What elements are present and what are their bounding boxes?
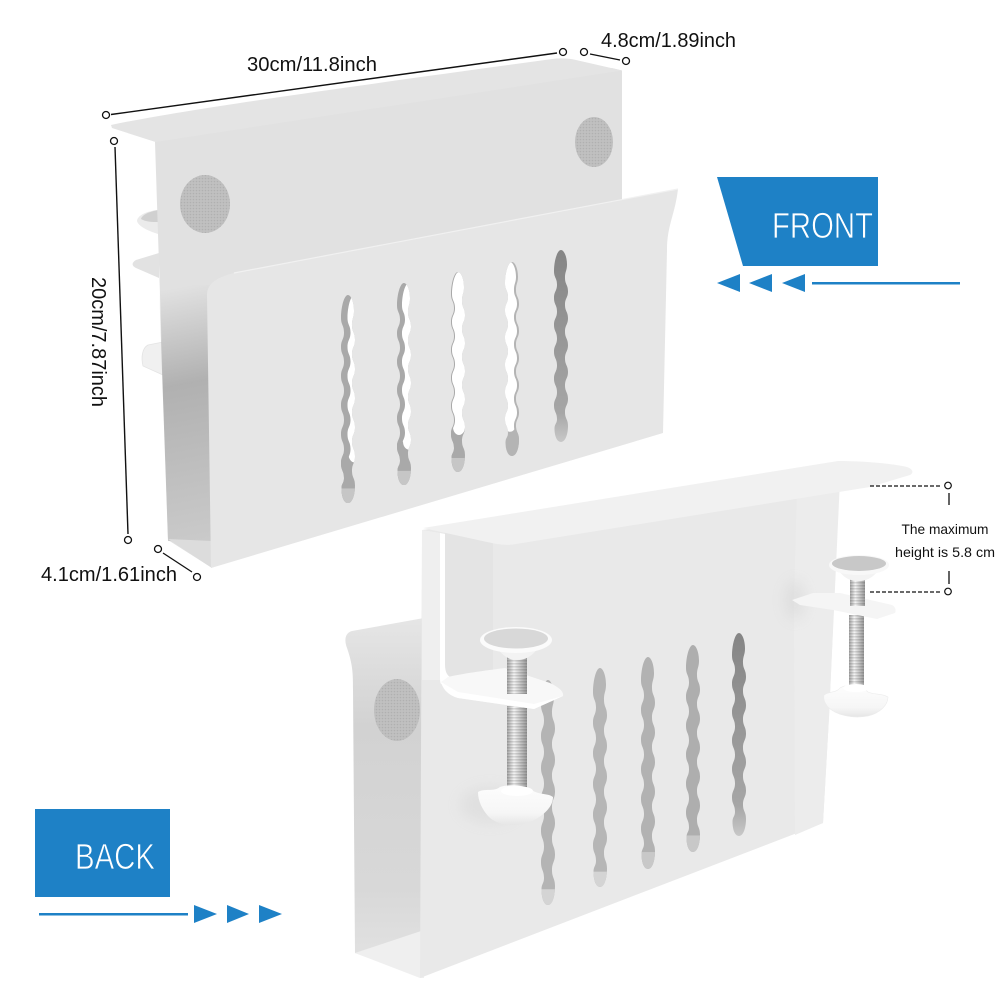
front panel top highlight bbox=[234, 189, 678, 273]
upper screw bbox=[507, 655, 527, 694]
front badge bbox=[717, 177, 878, 266]
callout: maximum clamp height: The maximum bbox=[902, 521, 988, 537]
slot a bbox=[541, 680, 555, 905]
slot 5 bbox=[554, 250, 568, 442]
inner recess bbox=[445, 530, 493, 682]
callout: maximum clamp height: height is 5.8 cm bbox=[895, 544, 995, 560]
front arrows bbox=[717, 274, 960, 292]
main panel bbox=[420, 470, 840, 978]
mesh pad right bbox=[575, 117, 613, 167]
back panel with flange bbox=[111, 58, 622, 568]
left clamp bbox=[441, 627, 563, 825]
slot b bbox=[593, 668, 607, 887]
callout: maximum clamp height bbox=[870, 482, 995, 595]
back badge bbox=[35, 809, 170, 897]
right clamp bbox=[792, 555, 896, 717]
slot 1 bbox=[341, 295, 355, 503]
dimension: height: 20cm/7.87inch bbox=[87, 277, 109, 407]
dimension: width bbox=[102, 48, 566, 118]
lower screw bbox=[507, 706, 527, 794]
rear clamp parts bbox=[133, 210, 163, 375]
bracket arm bbox=[792, 593, 896, 619]
rear side of the front panel bbox=[345, 618, 424, 978]
dimension: top depth: 4.8cm/1.89inch bbox=[601, 30, 736, 52]
arm edge highlight bbox=[441, 682, 563, 709]
back badge: BACK bbox=[75, 836, 155, 877]
bracket arm bbox=[441, 668, 563, 709]
front badge: FRONT bbox=[772, 205, 873, 246]
clamp shadows bbox=[460, 580, 805, 823]
right edge strip bbox=[794, 480, 840, 835]
back view organizer bbox=[345, 461, 912, 978]
floor of the front unit bbox=[168, 539, 212, 568]
top disc bbox=[480, 627, 552, 660]
white left bracket edge bbox=[422, 530, 452, 684]
slot 4 bbox=[505, 262, 519, 456]
slot c bbox=[641, 657, 655, 869]
wing knob bbox=[478, 785, 553, 825]
mesh pad bbox=[374, 679, 420, 741]
back arrows bbox=[39, 905, 282, 923]
top flange bbox=[423, 461, 912, 545]
slot 2 bbox=[397, 283, 411, 485]
upper screw bbox=[850, 575, 865, 606]
dimension: top depth bbox=[580, 30, 736, 64]
front panel bbox=[207, 189, 678, 568]
dimension: bottom depth bbox=[41, 546, 200, 586]
slot 3 bbox=[451, 272, 465, 472]
dimension: height bbox=[87, 138, 132, 544]
dimension: bottom depth: 4.1cm/1.61inch bbox=[41, 564, 177, 586]
slot e bbox=[732, 633, 746, 836]
dimension: width: 30cm/11.8inch bbox=[247, 54, 377, 76]
slot d bbox=[686, 645, 700, 852]
front view organizer bbox=[111, 58, 678, 568]
wing knob bbox=[824, 684, 888, 717]
lower screw bbox=[849, 615, 864, 691]
top disc bbox=[829, 555, 889, 581]
back panel slots bbox=[539, 633, 748, 905]
mesh pad left bbox=[180, 175, 230, 233]
front panel slots bbox=[336, 250, 570, 503]
